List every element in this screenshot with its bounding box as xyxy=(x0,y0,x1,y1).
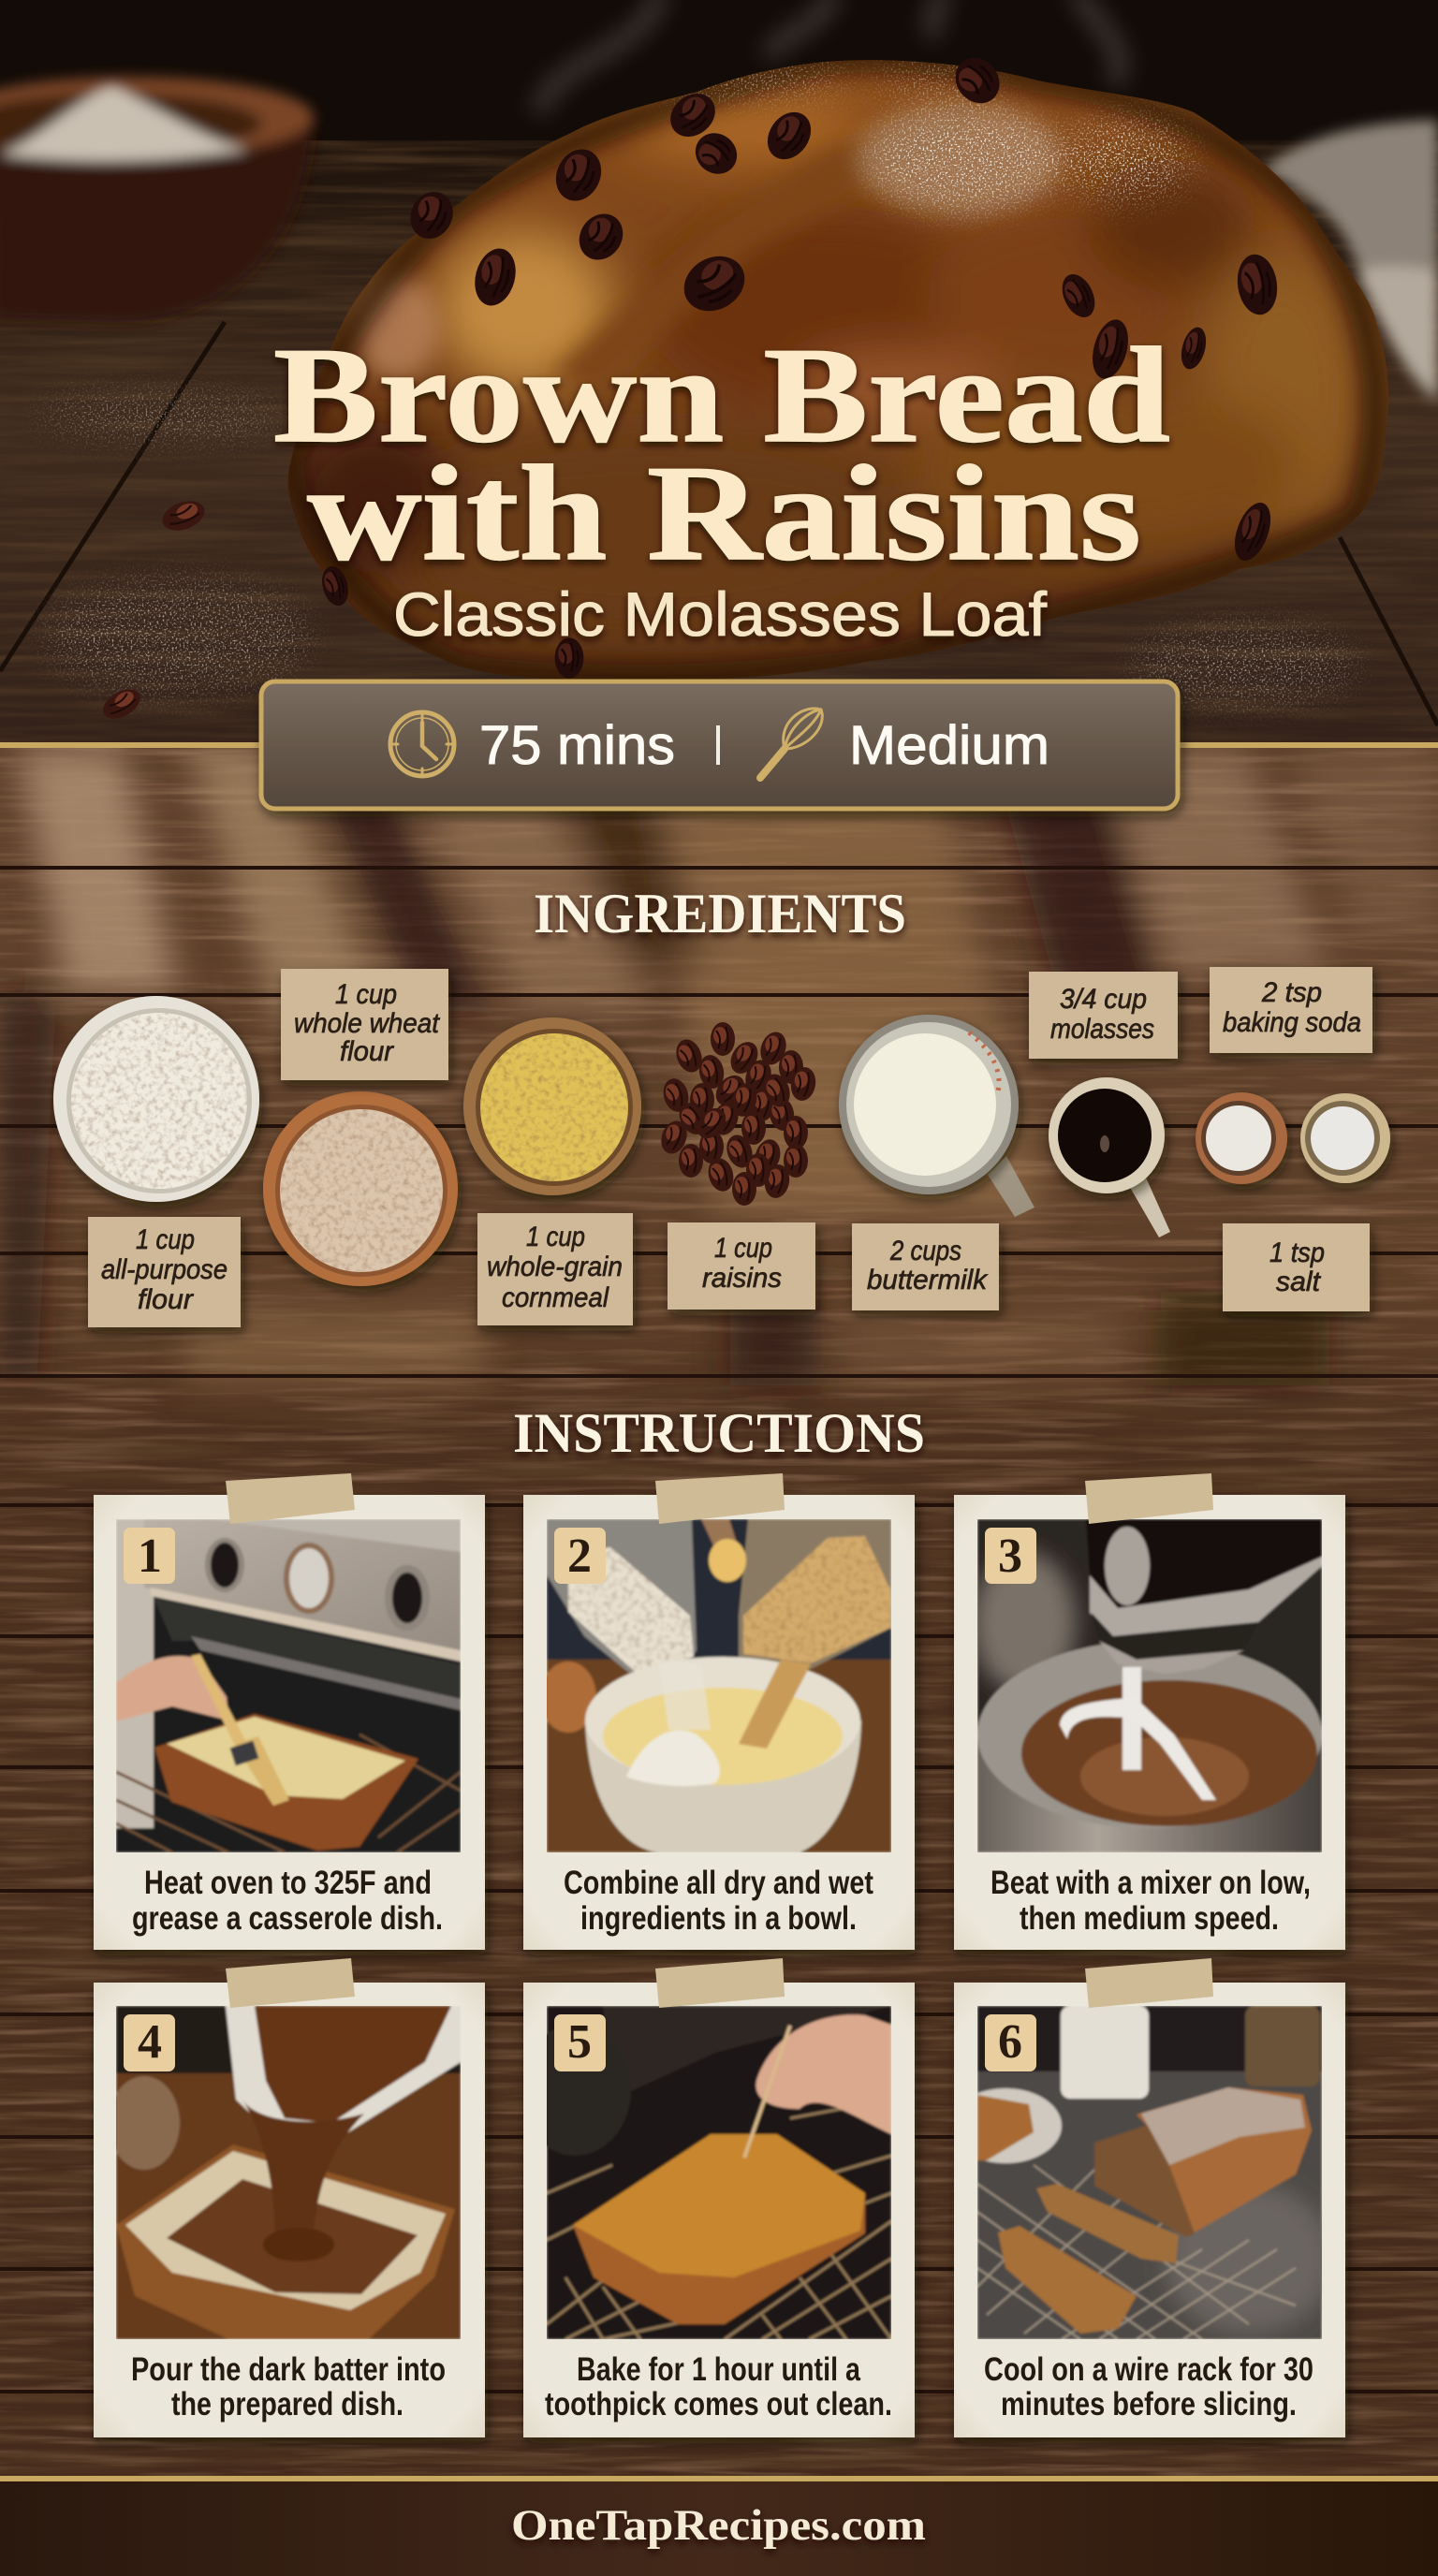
step 5 card xyxy=(519,1958,915,2437)
tape xyxy=(1085,1473,1213,1524)
caption: Pour the dark batter into xyxy=(131,2351,446,2388)
footer xyxy=(0,2476,1438,2576)
raisins on loaf xyxy=(318,49,1281,679)
caption: Heat oven to 325F and xyxy=(144,1865,432,1901)
step 4 card xyxy=(94,1958,485,2437)
ingredient: whole wheat flour bowl xyxy=(263,1091,458,1286)
ingredient: baking soda dish xyxy=(1196,1092,1287,1184)
note: molasses: 3/4 cup xyxy=(1060,984,1147,1015)
number badge 2 xyxy=(554,1528,606,1584)
caption: the prepared dish. xyxy=(171,2386,404,2422)
separator xyxy=(716,725,720,765)
number badge 6: 6 xyxy=(998,2015,1022,2069)
steam xyxy=(538,0,1119,112)
note: buttermilk: 2 cups xyxy=(889,1236,961,1266)
caption: Combine all dry and wet xyxy=(564,1865,873,1901)
ingredient: molasses cup xyxy=(1049,1077,1170,1237)
number badge 1: 1 xyxy=(138,1530,162,1583)
number badge 1 xyxy=(124,1528,175,1584)
note: whole wheat flour: flour xyxy=(340,1036,394,1067)
photo: greasing dish at oven xyxy=(116,1519,461,1852)
note: cornmeal: whole-grain xyxy=(487,1251,623,1282)
number badge 6 xyxy=(985,2014,1036,2071)
loose raisins on table xyxy=(98,496,209,724)
photo: loaf cooling on rack xyxy=(977,2006,1322,2339)
number badge 3: 3 xyxy=(998,1530,1022,1583)
caption: minutes before slicing. xyxy=(1001,2386,1297,2422)
heading: instructions: INSTRUCTIONS xyxy=(513,1402,925,1464)
tape xyxy=(655,1958,785,2008)
note: raisins: raisins xyxy=(702,1263,782,1294)
caption xyxy=(545,2351,892,2422)
caption xyxy=(132,1865,443,1937)
duration: 75 mins xyxy=(479,715,675,776)
icon: clock xyxy=(390,712,454,776)
note: baking soda: 2 tsp xyxy=(1261,977,1322,1008)
caption: Cool on a wire rack for 30 xyxy=(984,2351,1313,2388)
tape xyxy=(226,1473,355,1524)
note: all-purpose flour: flour xyxy=(138,1284,194,1315)
caption: toothpick comes out clean. xyxy=(545,2386,892,2422)
note: salt xyxy=(1223,1223,1370,1311)
caption xyxy=(564,1865,873,1937)
number badge 4: 4 xyxy=(138,2015,162,2069)
number badge 5 xyxy=(554,2014,606,2071)
photo: toothpick test in oven xyxy=(547,2006,891,2339)
number badge 3 xyxy=(985,1528,1036,1584)
wood background xyxy=(0,739,1438,2576)
note: all-purpose flour xyxy=(88,1217,241,1327)
caption: ingredients in a bowl. xyxy=(580,1900,857,1937)
difficulty: Medium xyxy=(849,715,1049,776)
caption xyxy=(984,2351,1313,2422)
subtitle: Classic Molasses Loaf xyxy=(393,579,1048,649)
caption xyxy=(990,1865,1311,1937)
number badge 5: 5 xyxy=(567,2015,592,2069)
ingredient: salt dish xyxy=(1300,1093,1390,1183)
step 1 card xyxy=(94,1473,485,1950)
tape xyxy=(1085,1958,1213,2008)
caption: Bake for 1 hour until a xyxy=(577,2351,860,2388)
note: buttermilk xyxy=(852,1223,999,1310)
note: molasses xyxy=(1029,972,1178,1059)
note: baking soda xyxy=(1210,967,1372,1053)
caption: then medium speed. xyxy=(1020,1900,1279,1937)
caption: grease a casserole dish. xyxy=(132,1900,443,1937)
title: Brown Bread xyxy=(273,319,1170,471)
step 6 card xyxy=(949,1958,1345,2437)
photo: pouring dry ingredients xyxy=(547,1519,891,1852)
note: molasses: molasses xyxy=(1050,1014,1154,1045)
photo: pouring batter into dish xyxy=(116,2006,461,2339)
title: with Raisins xyxy=(307,437,1141,589)
note: cornmeal: 1 cup xyxy=(526,1222,585,1252)
note: buttermilk: buttermilk xyxy=(867,1265,989,1295)
hero photo: bread on table xyxy=(0,0,1438,745)
note: whole wheat flour xyxy=(281,969,448,1080)
ingredient: buttermilk measuring cup xyxy=(839,1015,1034,1217)
panel: ingredients xyxy=(53,967,1390,1327)
loaf xyxy=(271,47,1404,693)
time and difficulty pill xyxy=(261,681,1178,809)
note: salt: salt xyxy=(1276,1266,1322,1297)
note: whole wheat flour: whole wheat xyxy=(294,1008,441,1039)
note: cornmeal: cornmeal xyxy=(502,1282,609,1313)
tape xyxy=(655,1473,785,1524)
blurred cloth xyxy=(1264,120,1438,402)
heading: ingredients: INGREDIENTS xyxy=(534,883,906,944)
caption: Beat with a mixer on low, xyxy=(990,1865,1311,1901)
note: whole wheat flour: 1 cup xyxy=(335,979,397,1010)
blurred bowl of flour xyxy=(0,77,314,323)
note: baking soda: baking soda xyxy=(1223,1007,1361,1038)
title xyxy=(273,319,1170,589)
note: raisins: 1 cup xyxy=(714,1233,772,1264)
note: salt: 1 tsp xyxy=(1269,1237,1325,1268)
step 3 card xyxy=(954,1473,1345,1950)
step 2 card xyxy=(523,1473,915,1950)
note: all-purpose flour: all-purpose xyxy=(101,1254,227,1285)
photo: stand mixer beating batter xyxy=(977,1519,1322,1852)
ingredient: all-purpose flour bowl xyxy=(53,996,259,1202)
note: all-purpose flour: 1 cup xyxy=(136,1224,195,1255)
gold divider xyxy=(0,742,1438,748)
number badge 2: 2 xyxy=(567,1530,592,1583)
tape xyxy=(226,1958,355,2008)
note: cornmeal xyxy=(477,1213,633,1325)
icon: whisk xyxy=(760,709,822,778)
flour dust on table xyxy=(37,396,1357,702)
number badge 4 xyxy=(124,2014,175,2071)
caption xyxy=(131,2351,446,2422)
ingredient: cornmeal bowl xyxy=(463,1017,641,1195)
website: OneTapRecipes.com xyxy=(511,2501,926,2550)
note: raisins xyxy=(668,1222,815,1310)
ingredient: raisins pile xyxy=(657,1022,818,1206)
